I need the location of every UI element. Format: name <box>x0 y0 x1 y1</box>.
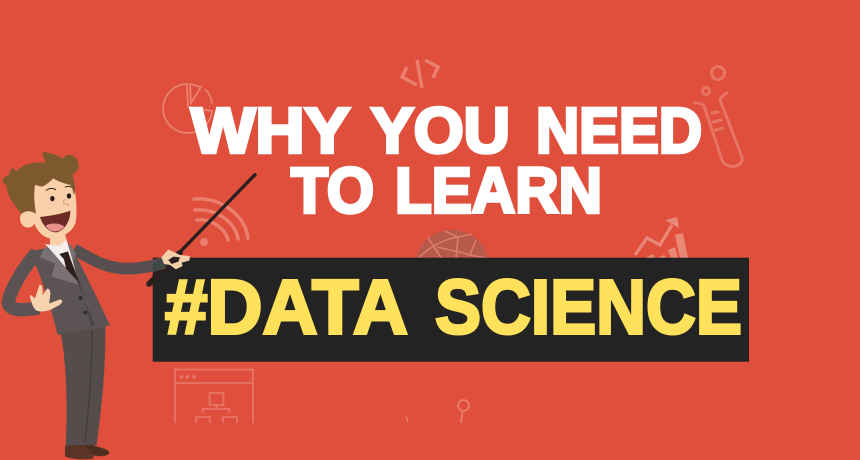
icon: globe <box>417 230 487 258</box>
tie <box>59 251 80 284</box>
icon: growth chart with arrow <box>635 217 688 258</box>
icon: pie chart <box>163 84 212 133</box>
heading: why you need: NEED <box>536 94 702 166</box>
mouth <box>40 211 70 232</box>
raised hand <box>30 285 62 311</box>
icon: code brackets <box>402 60 438 88</box>
neck <box>50 233 68 248</box>
face <box>33 177 77 239</box>
pointing arm <box>74 249 164 269</box>
left arm <box>8 253 39 310</box>
heading: to learn: TO <box>291 154 374 226</box>
far leg and shoe <box>83 445 109 456</box>
pointer stick <box>149 175 255 284</box>
eyes and brows <box>50 196 54 201</box>
shirt <box>45 240 78 283</box>
pointing hand <box>161 249 190 269</box>
icon: pin <box>458 400 469 423</box>
heading: why you need: WHY <box>191 94 350 166</box>
icon: small tick <box>406 416 408 422</box>
jacket buttons <box>79 296 83 300</box>
banner text: #DATA <box>165 264 408 350</box>
icon: test tube and bubbles <box>695 66 742 166</box>
banner text <box>165 264 742 350</box>
trousers <box>61 326 105 446</box>
banner: data science <box>153 258 749 362</box>
heading: to learn: LEARN <box>395 154 602 226</box>
heading: to learn <box>291 154 602 226</box>
heading: why you need <box>191 94 702 166</box>
ear <box>20 210 36 228</box>
icon: wifi signal <box>194 199 248 246</box>
icon: browser window with sitemap <box>175 370 253 423</box>
banner text: SCIENCE <box>435 264 742 350</box>
nose <box>63 199 69 206</box>
jacket <box>35 245 110 335</box>
heading: why you need: YOU <box>371 94 510 166</box>
shoe <box>65 445 94 459</box>
lapels <box>40 246 79 285</box>
hair <box>3 152 79 214</box>
character: presenter with pointer <box>3 152 255 459</box>
